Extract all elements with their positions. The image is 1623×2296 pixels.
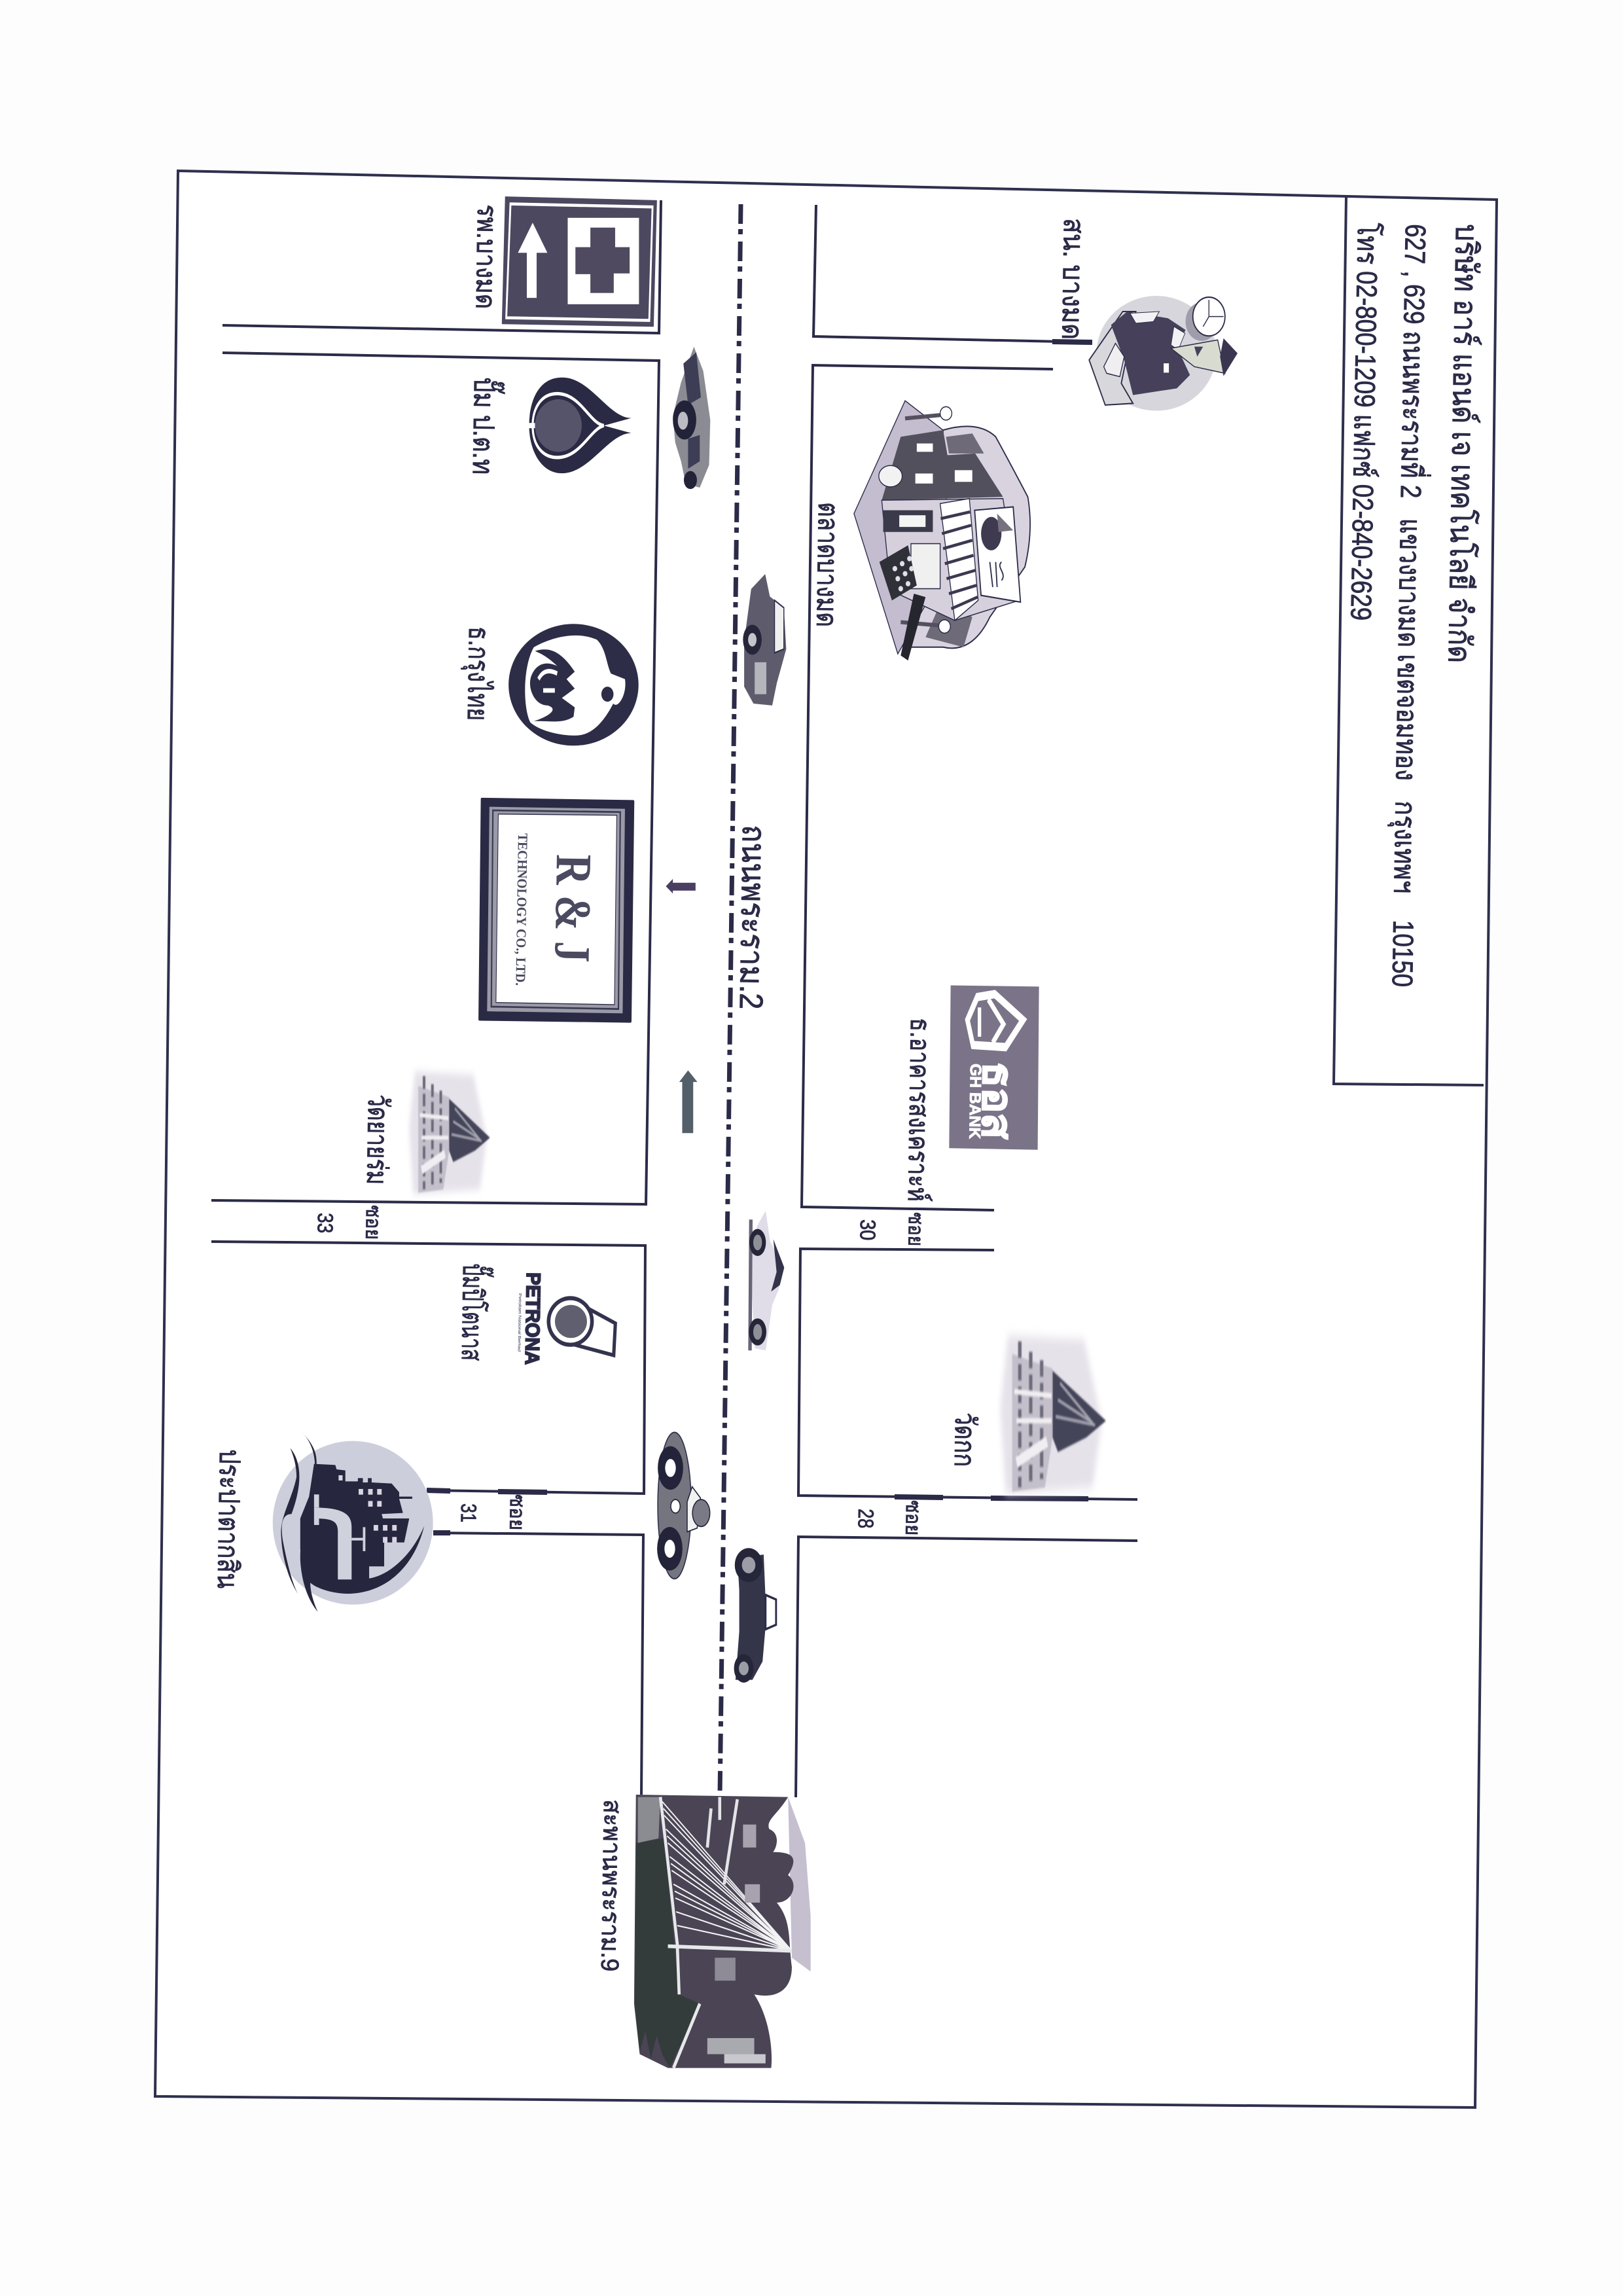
label: PTT station: ปั๊ม ป.ต.ท xyxy=(467,377,505,475)
Petronas wordmark: PETRONA xyxy=(521,1272,544,1365)
company address: 627 , 629 ถนนพระรามที่ 2 แขวงบางมด เขตจอมทอง กรุงเทพฯ 10150 xyxy=(1385,224,1436,988)
road centre line xyxy=(720,204,741,1795)
icon: waterworks logo xyxy=(273,1431,433,1612)
label: soi 28 number: 28 xyxy=(854,1509,878,1528)
label: soi 31 number: 31 xyxy=(457,1503,481,1522)
label: Petronas station: ปั๊มปิโตนาส xyxy=(455,1263,494,1361)
arrow: direction of travel xyxy=(679,1070,698,1133)
icon: PTT logo xyxy=(529,378,632,473)
R and J subtitle: TECHNOLOGY CO., LTD. xyxy=(512,833,531,986)
label: Bang Mot hospital: รพ.บางมด xyxy=(470,204,503,310)
icon: race car xyxy=(657,1432,710,1579)
label: Krungthai bank: ธ.กรุงไทย xyxy=(460,626,495,721)
label: Wat Kok: วัดกก xyxy=(948,1412,981,1467)
icon: R and J company sign xyxy=(480,799,633,1021)
panel: company address box xyxy=(1334,196,1485,1085)
icon: car 2 xyxy=(743,574,786,706)
icon: hospital sign xyxy=(502,196,657,327)
map frame xyxy=(155,171,1497,2108)
label: soi 28 word: ซอย xyxy=(901,1500,925,1535)
label: police station: สน. บางมด xyxy=(1056,218,1090,340)
label: Wat Yai Rom: วัดยายร่ม xyxy=(361,1094,394,1185)
company name: บริษัท อาร์ แอนด์ เจ เทคโนโลยี จำกัด xyxy=(1441,224,1485,664)
label: soi 30 word: ซอย xyxy=(904,1212,928,1246)
label: Rama 9 bridge: สะพานพระราม.9 xyxy=(596,1799,626,1971)
icon: market building xyxy=(854,401,1030,660)
Petronas tagline: Petroliam Nasional Berhad xyxy=(517,1293,522,1352)
R and J logotype: R & J xyxy=(544,854,603,963)
icon: car 4 xyxy=(734,1548,776,1683)
icon: temple Wat Yai Rom xyxy=(409,1071,490,1194)
label: GH bank: ธ.อาคารสงเคราะห์ xyxy=(902,1018,936,1202)
icon: temple Wat Kok xyxy=(1000,1335,1106,1494)
label: soi 31 word: ซอย xyxy=(505,1494,529,1530)
label: soi 33 number: 33 xyxy=(313,1213,338,1233)
label: soi 30 number: 30 xyxy=(855,1219,880,1240)
icon: person with clock xyxy=(1089,296,1238,411)
icon: car 3 xyxy=(749,1211,784,1350)
icon: GH bank logo xyxy=(949,985,1039,1150)
label: Taksin waterworks: ประปาตากสิน xyxy=(211,1449,245,1589)
GH bank Thai initials: ธอส xyxy=(973,1062,1022,1139)
icon: car 1 xyxy=(673,347,710,489)
label: road name: ถนนพระราม.2 xyxy=(733,825,772,1010)
phone and fax: โทร 02-800-1209 แฟกซ์ 02-840-2629 xyxy=(1344,223,1384,621)
road network xyxy=(211,200,1137,1797)
icon: Petronas logo xyxy=(517,1272,615,1365)
label: soi 33 word: ซอย xyxy=(361,1205,385,1240)
label: Bang Mot market: ตลาดบางมด xyxy=(810,502,844,628)
icon: Krungthai bank logo xyxy=(508,624,639,745)
icon: Rama 9 bridge xyxy=(634,1795,811,2068)
GH bank Latin name: GH BANK xyxy=(965,1064,984,1139)
arrow: outbound small xyxy=(666,879,696,893)
